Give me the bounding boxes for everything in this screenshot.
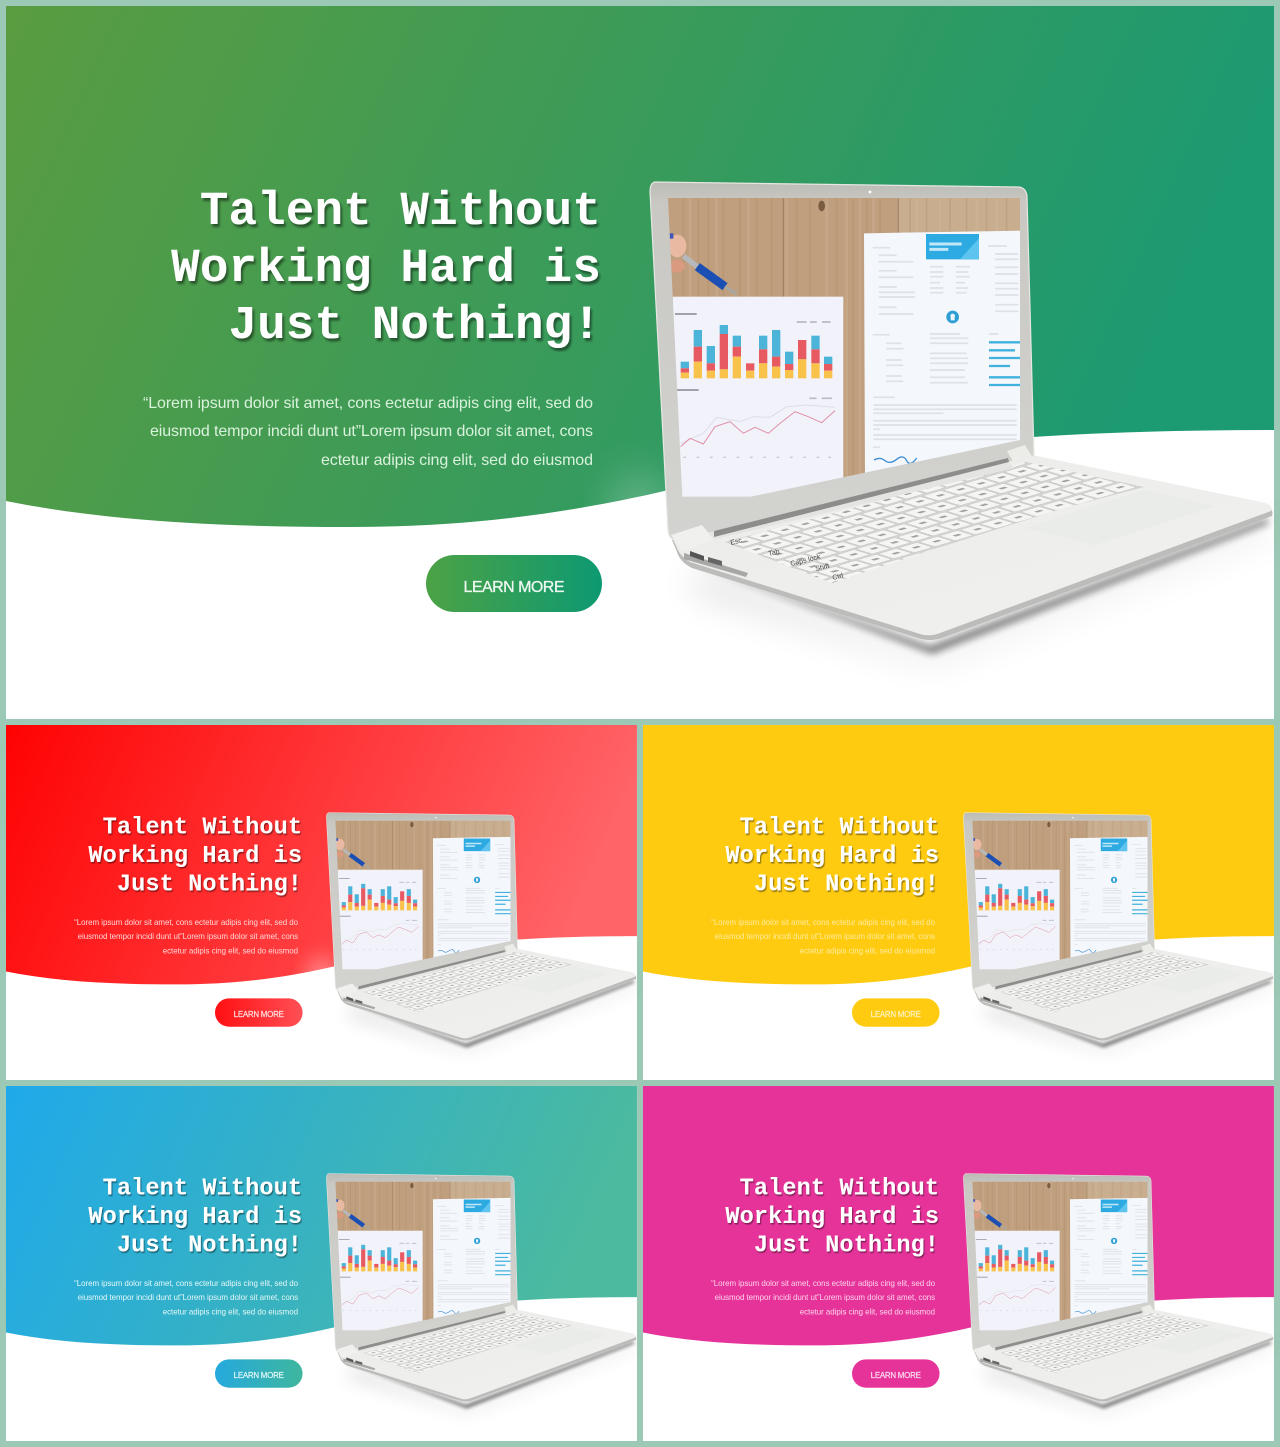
heading <box>725 1176 939 1259</box>
laptop mockup <box>650 182 1272 662</box>
keyboard key labels: Caps lock <box>790 554 822 568</box>
heading: Working Hard is <box>725 843 939 870</box>
learn more button <box>215 1359 303 1388</box>
body paragraph: eiusmod tempor incidi dunt ut”Lorem ipsum dolor sit amet, cons <box>715 1293 935 1302</box>
body paragraph: eiusmod tempor incidi dunt ut”Lorem ipsum dolor sit amet, cons <box>715 932 935 941</box>
laptop mockup <box>963 1174 1273 1413</box>
red wave background <box>6 725 637 984</box>
laptop mockup <box>963 813 1273 1052</box>
yellow wave background <box>643 725 1274 984</box>
body paragraph: ectetur adipis cing elit, sed do eiusmod <box>163 1308 298 1317</box>
laptop mockup <box>326 1174 636 1413</box>
pink wave background <box>643 1086 1274 1345</box>
heading: Just Nothing! <box>228 299 601 353</box>
body paragraph <box>711 1279 936 1317</box>
body paragraph <box>711 918 936 956</box>
learn more button: LEARN MORE <box>464 579 564 596</box>
white glow beside laptop <box>594 460 666 505</box>
panel: large green slide <box>6 6 1274 719</box>
heading: Talent Without <box>200 185 601 239</box>
heading: Just Nothing! <box>117 871 302 898</box>
body paragraph: “Lorem ipsum dolor sit amet, cons ectetur adipis cing elit, sed do <box>74 1279 299 1288</box>
heading: Just Nothing! <box>117 1232 302 1259</box>
body paragraph: eiusmod tempor incidi dunt ut”Lorem ipsum dolor sit amet, cons <box>150 423 593 440</box>
heading <box>88 815 302 898</box>
learn more button: LEARN MORE <box>871 1371 921 1380</box>
learn more button <box>426 555 602 612</box>
keyboard key labels <box>730 537 844 582</box>
heading: Working Hard is <box>171 242 601 296</box>
panel: pink slide <box>643 1086 1274 1441</box>
learn more button <box>852 998 940 1027</box>
panel: yellow slide <box>643 725 1274 1080</box>
body paragraph: “Lorem ipsum dolor sit amet, cons ectetur adipis cing elit, sed do <box>711 1279 936 1288</box>
keyboard key labels: Ctrl <box>832 572 844 582</box>
body paragraph: eiusmod tempor incidi dunt ut”Lorem ipsum dolor sit amet, cons <box>78 932 298 941</box>
keyboard key labels: Shift <box>815 563 830 573</box>
panel: blue-teal slide <box>6 1086 637 1441</box>
heading: Talent Without <box>740 815 939 842</box>
learn more button <box>852 1359 940 1388</box>
body paragraph: ectetur adipis cing elit, sed do eiusmod <box>800 947 935 956</box>
body paragraph <box>74 918 299 956</box>
heading: Talent Without <box>103 1176 302 1203</box>
keyboard key labels: Esc <box>730 537 743 547</box>
heading <box>725 815 939 898</box>
body paragraph: ectetur adipis cing elit, sed do eiusmod <box>800 1308 935 1317</box>
body paragraph: ectetur adipis cing elit, sed do eiusmod <box>321 452 593 469</box>
heading <box>88 1176 302 1259</box>
body paragraph: ectetur adipis cing elit, sed do eiusmod <box>163 947 298 956</box>
heading: Working Hard is <box>88 843 302 870</box>
learn more button <box>215 998 303 1027</box>
keyboard key labels: Tab <box>768 548 781 558</box>
heading: Just Nothing! <box>754 871 939 898</box>
heading: Working Hard is <box>725 1204 939 1231</box>
body paragraph <box>74 1279 299 1317</box>
learn more button: LEARN MORE <box>871 1010 921 1019</box>
body paragraph <box>143 395 593 469</box>
heading: Talent Without <box>103 815 302 842</box>
learn more button: LEARN MORE <box>234 1010 284 1019</box>
body paragraph: “Lorem ipsum dolor sit amet, cons ectetur adipis cing elit, sed do <box>143 395 593 412</box>
blue-teal wave background <box>6 1086 637 1345</box>
heading <box>171 185 601 353</box>
green wave background <box>6 6 1274 527</box>
laptop mockup <box>326 813 636 1052</box>
white glow beside laptop <box>296 949 334 974</box>
body paragraph: eiusmod tempor incidi dunt ut”Lorem ipsum dolor sit amet, cons <box>78 1293 298 1302</box>
body paragraph: “Lorem ipsum dolor sit amet, cons ectetur adipis cing elit, sed do <box>711 918 936 927</box>
learn more button: LEARN MORE <box>234 1371 284 1380</box>
heading: Talent Without <box>740 1176 939 1203</box>
heading: Working Hard is <box>88 1204 302 1231</box>
body paragraph: “Lorem ipsum dolor sit amet, cons ectetur adipis cing elit, sed do <box>74 918 299 927</box>
heading: Just Nothing! <box>754 1232 939 1259</box>
panel: red slide <box>6 725 637 1080</box>
